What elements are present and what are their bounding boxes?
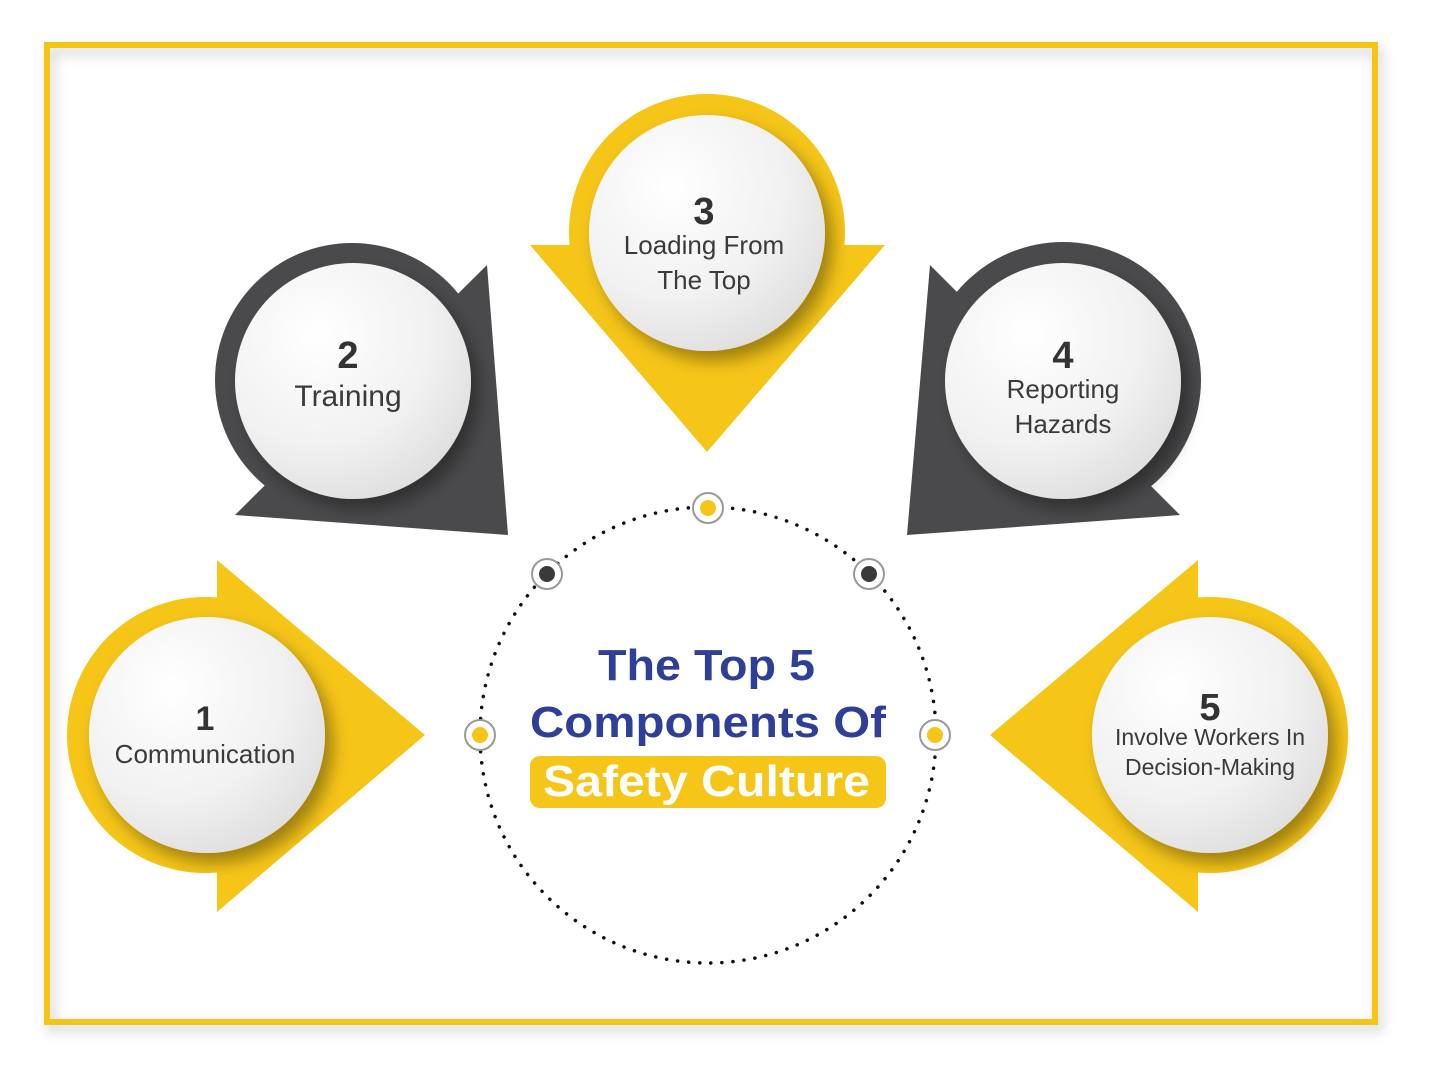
markers xyxy=(465,493,950,750)
item 1: Communication: 1 xyxy=(196,700,214,738)
item 4: Reporting Hazards: 4 xyxy=(1052,335,1074,377)
title xyxy=(530,641,886,808)
title: The Top 5 xyxy=(598,641,815,690)
item 2: Training: 2 xyxy=(337,335,359,377)
dotted circle xyxy=(480,507,936,963)
item 5: Involve Workers In Decision-Making xyxy=(990,560,1348,912)
item 2: Training xyxy=(215,243,508,535)
item 3: Loading From The Top xyxy=(530,94,885,452)
item 1: Communication xyxy=(67,560,425,912)
item 4: Reporting Hazards: Reporting xyxy=(1007,374,1119,404)
title: Components Of xyxy=(530,698,886,747)
item 4: Reporting Hazards: Hazards xyxy=(1015,409,1111,439)
item 3: Loading From The Top: Loading From xyxy=(624,230,784,260)
item 2: Training: Training xyxy=(294,380,402,413)
item 3: Loading From The Top: The Top xyxy=(657,265,751,295)
item 4: Reporting Hazards xyxy=(907,242,1201,535)
item 5: Involve Workers In Decision-Making: 5 xyxy=(1199,687,1221,729)
title: Safety Culture xyxy=(543,757,870,806)
item 5: Involve Workers In Decision-Making: Involve Workers In xyxy=(1115,724,1305,750)
item 1: Communication: Communication xyxy=(115,739,295,769)
item 3: Loading From The Top: 3 xyxy=(693,191,715,233)
item 5: Involve Workers In Decision-Making: Decision-Making xyxy=(1125,754,1295,780)
